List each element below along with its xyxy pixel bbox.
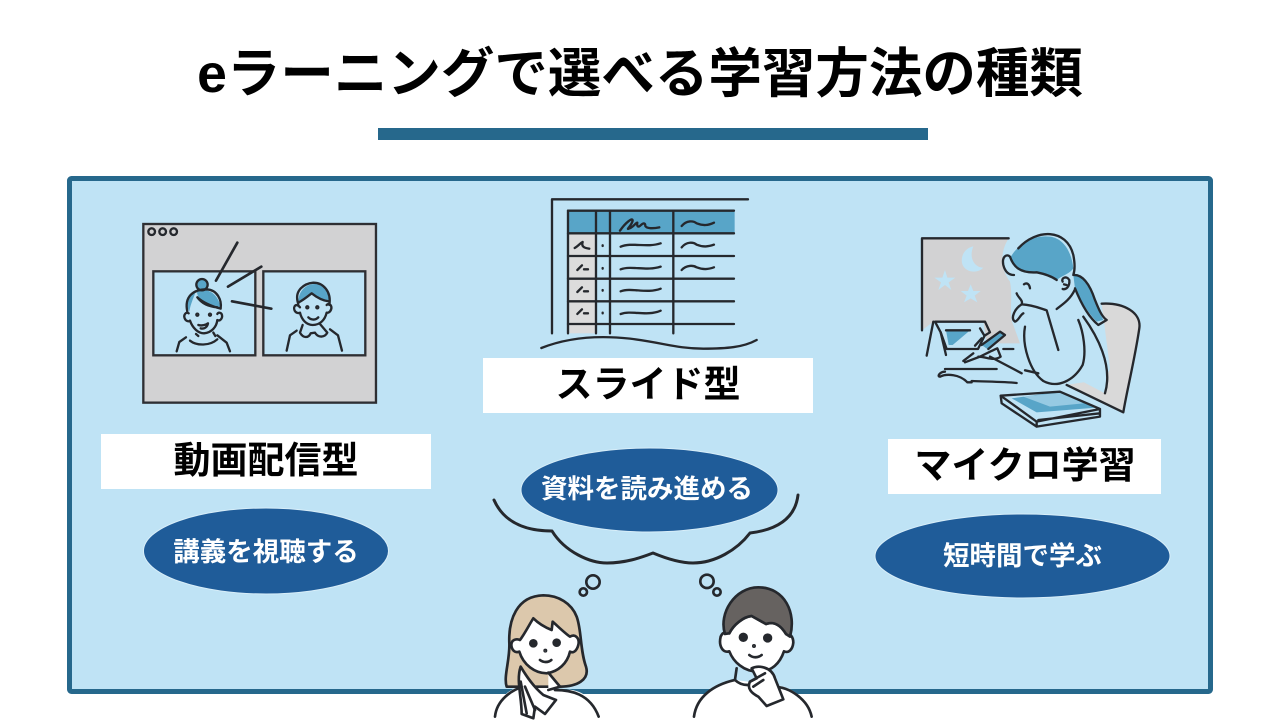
person: man	[694, 587, 812, 717]
icon: slide document table	[541, 199, 757, 349]
main panel	[70, 178, 1210, 692]
label: video delivery	[101, 434, 431, 489]
label: micro learning	[888, 439, 1161, 494]
label: slide type: スライド型	[556, 364, 740, 405]
thought dots	[580, 575, 721, 596]
oval: watch lectures: 講義を視聴する	[173, 537, 359, 567]
label: slide type	[483, 358, 813, 413]
thought bubble outline	[494, 495, 798, 563]
oval: read materials	[521, 448, 778, 532]
label: micro learning: マイクロ学習	[914, 445, 1136, 486]
oval: read materials: 資料を読み進める	[541, 474, 753, 504]
oval: learn in short time: 短時間で学ぶ	[943, 541, 1102, 571]
title: eラーニングで選べる学習方法の種類	[197, 45, 1083, 104]
illustration: two people thinking	[495, 575, 812, 718]
person: woman	[495, 595, 599, 718]
label: video delivery: 動画配信型	[174, 440, 358, 481]
oval: learn in short time	[875, 514, 1170, 598]
icon: student studying at night	[922, 234, 1140, 427]
title underline bar	[378, 128, 928, 140]
oval: watch lectures	[144, 508, 388, 594]
icon: video call window	[143, 224, 376, 403]
